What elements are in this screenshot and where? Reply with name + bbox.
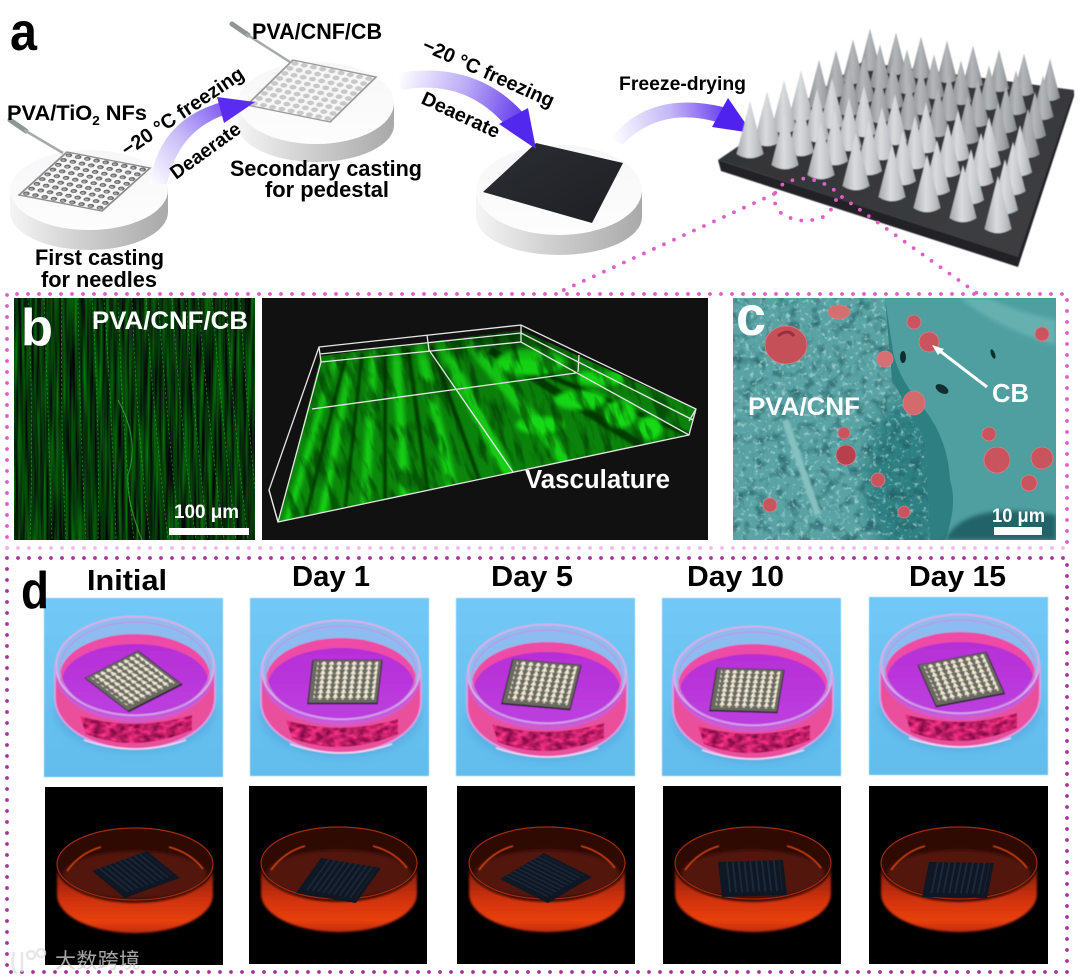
text: freezing step 1: −20 °C freezing	[117, 63, 248, 161]
photo: Day 15 daylight	[869, 597, 1048, 775]
pedestal plate	[718, 62, 1074, 267]
photo: Day 10 fluorescence	[663, 786, 841, 964]
panel label d: d	[21, 562, 49, 620]
icon: watermark logo	[13, 949, 45, 974]
panel c: SEM image	[733, 298, 1056, 560]
callout: CB arrow and label: CB	[992, 378, 1029, 408]
text: Vasculature: Vasculature	[525, 466, 670, 494]
text: deaerate step 1: Deaerate	[166, 118, 245, 184]
text: secondary casting: for pedestal	[265, 177, 389, 202]
text: PVA/CNF/CB: PVA/CNF/CB	[252, 19, 382, 44]
text: PVA/TiO2 NFs: NFs	[100, 102, 147, 125]
text: watermark: 大数跨境	[55, 950, 140, 973]
text: deaerate step 2: Deaerate	[418, 88, 503, 143]
photo: Day 5 fluorescence	[457, 786, 635, 964]
red CB cells	[763, 305, 1053, 518]
text: PVA/CNF/CB on image: PVA/CNF/CB	[92, 307, 248, 335]
panel b: confocal fibre image	[14, 298, 256, 540]
panel label a: a	[10, 2, 38, 62]
heading: Day 1: Day 1	[292, 561, 370, 593]
text: freezing step 2: −20 °C freezing	[419, 34, 558, 112]
photo: Initial fluorescence	[45, 787, 223, 965]
textured fibre region	[733, 298, 930, 540]
panel frame: d	[7, 558, 1067, 972]
needle array	[736, 29, 1060, 233]
scale bar: 100 μm: 100 μm	[174, 502, 239, 523]
photo: Day 1 daylight	[250, 598, 429, 776]
scale bar: 10 μm: 10 μm	[992, 506, 1045, 527]
callout: CB arrow and label	[932, 345, 1029, 408]
arrow 3	[611, 98, 752, 145]
heading: Initial: Initial	[87, 565, 167, 597]
text: secondary casting: Secondary casting	[230, 156, 422, 181]
mold 1: first casting	[10, 120, 168, 250]
arrow 2	[397, 71, 536, 149]
zoom callout: dotted loop and leader lines	[555, 179, 978, 294]
text: first casting: for needles	[41, 267, 157, 292]
text: PVA/CNF: PVA/CNF	[748, 393, 860, 421]
white box frame	[269, 325, 696, 522]
photo: Day 1 fluorescence	[249, 786, 427, 964]
text: first casting: First casting	[35, 245, 164, 270]
photo: Initial daylight	[44, 598, 223, 777]
photo: Day 5 daylight	[456, 598, 635, 776]
arrow 1	[150, 97, 255, 184]
text: PVA/TiO2 NFs: 2	[92, 113, 100, 128]
text: freeze-drying: Freeze-drying	[619, 73, 746, 95]
photo: Day 15 fluorescence	[869, 786, 1048, 964]
text: first casting	[35, 245, 164, 292]
smooth film region	[885, 298, 1056, 540]
panel b: vasculature 3D image	[262, 298, 708, 540]
panel frame: b and c	[7, 294, 1067, 548]
microneedle patch	[718, 29, 1074, 267]
panel label b: b	[21, 299, 53, 357]
pores	[900, 349, 997, 396]
text: secondary casting	[230, 156, 422, 202]
panel a: fabrication process	[7, 2, 1074, 292]
panel d: degradation time series	[21, 561, 1048, 965]
watermark	[13, 949, 140, 974]
green vasculature volume	[278, 330, 695, 522]
scale bar: 100 μm	[169, 502, 249, 535]
heading: Day 15: Day 15	[909, 561, 1006, 593]
panel label c: c	[736, 284, 766, 347]
mold 3: black film on disk	[476, 143, 642, 255]
mold 2: secondary casting	[232, 24, 394, 162]
heading: Day 10: Day 10	[687, 561, 784, 593]
text: PVA/TiO2 NFs: PVA/TiO	[7, 102, 89, 125]
photo: Day 10 daylight	[662, 598, 841, 776]
heading: Day 5: Day 5	[491, 561, 573, 593]
